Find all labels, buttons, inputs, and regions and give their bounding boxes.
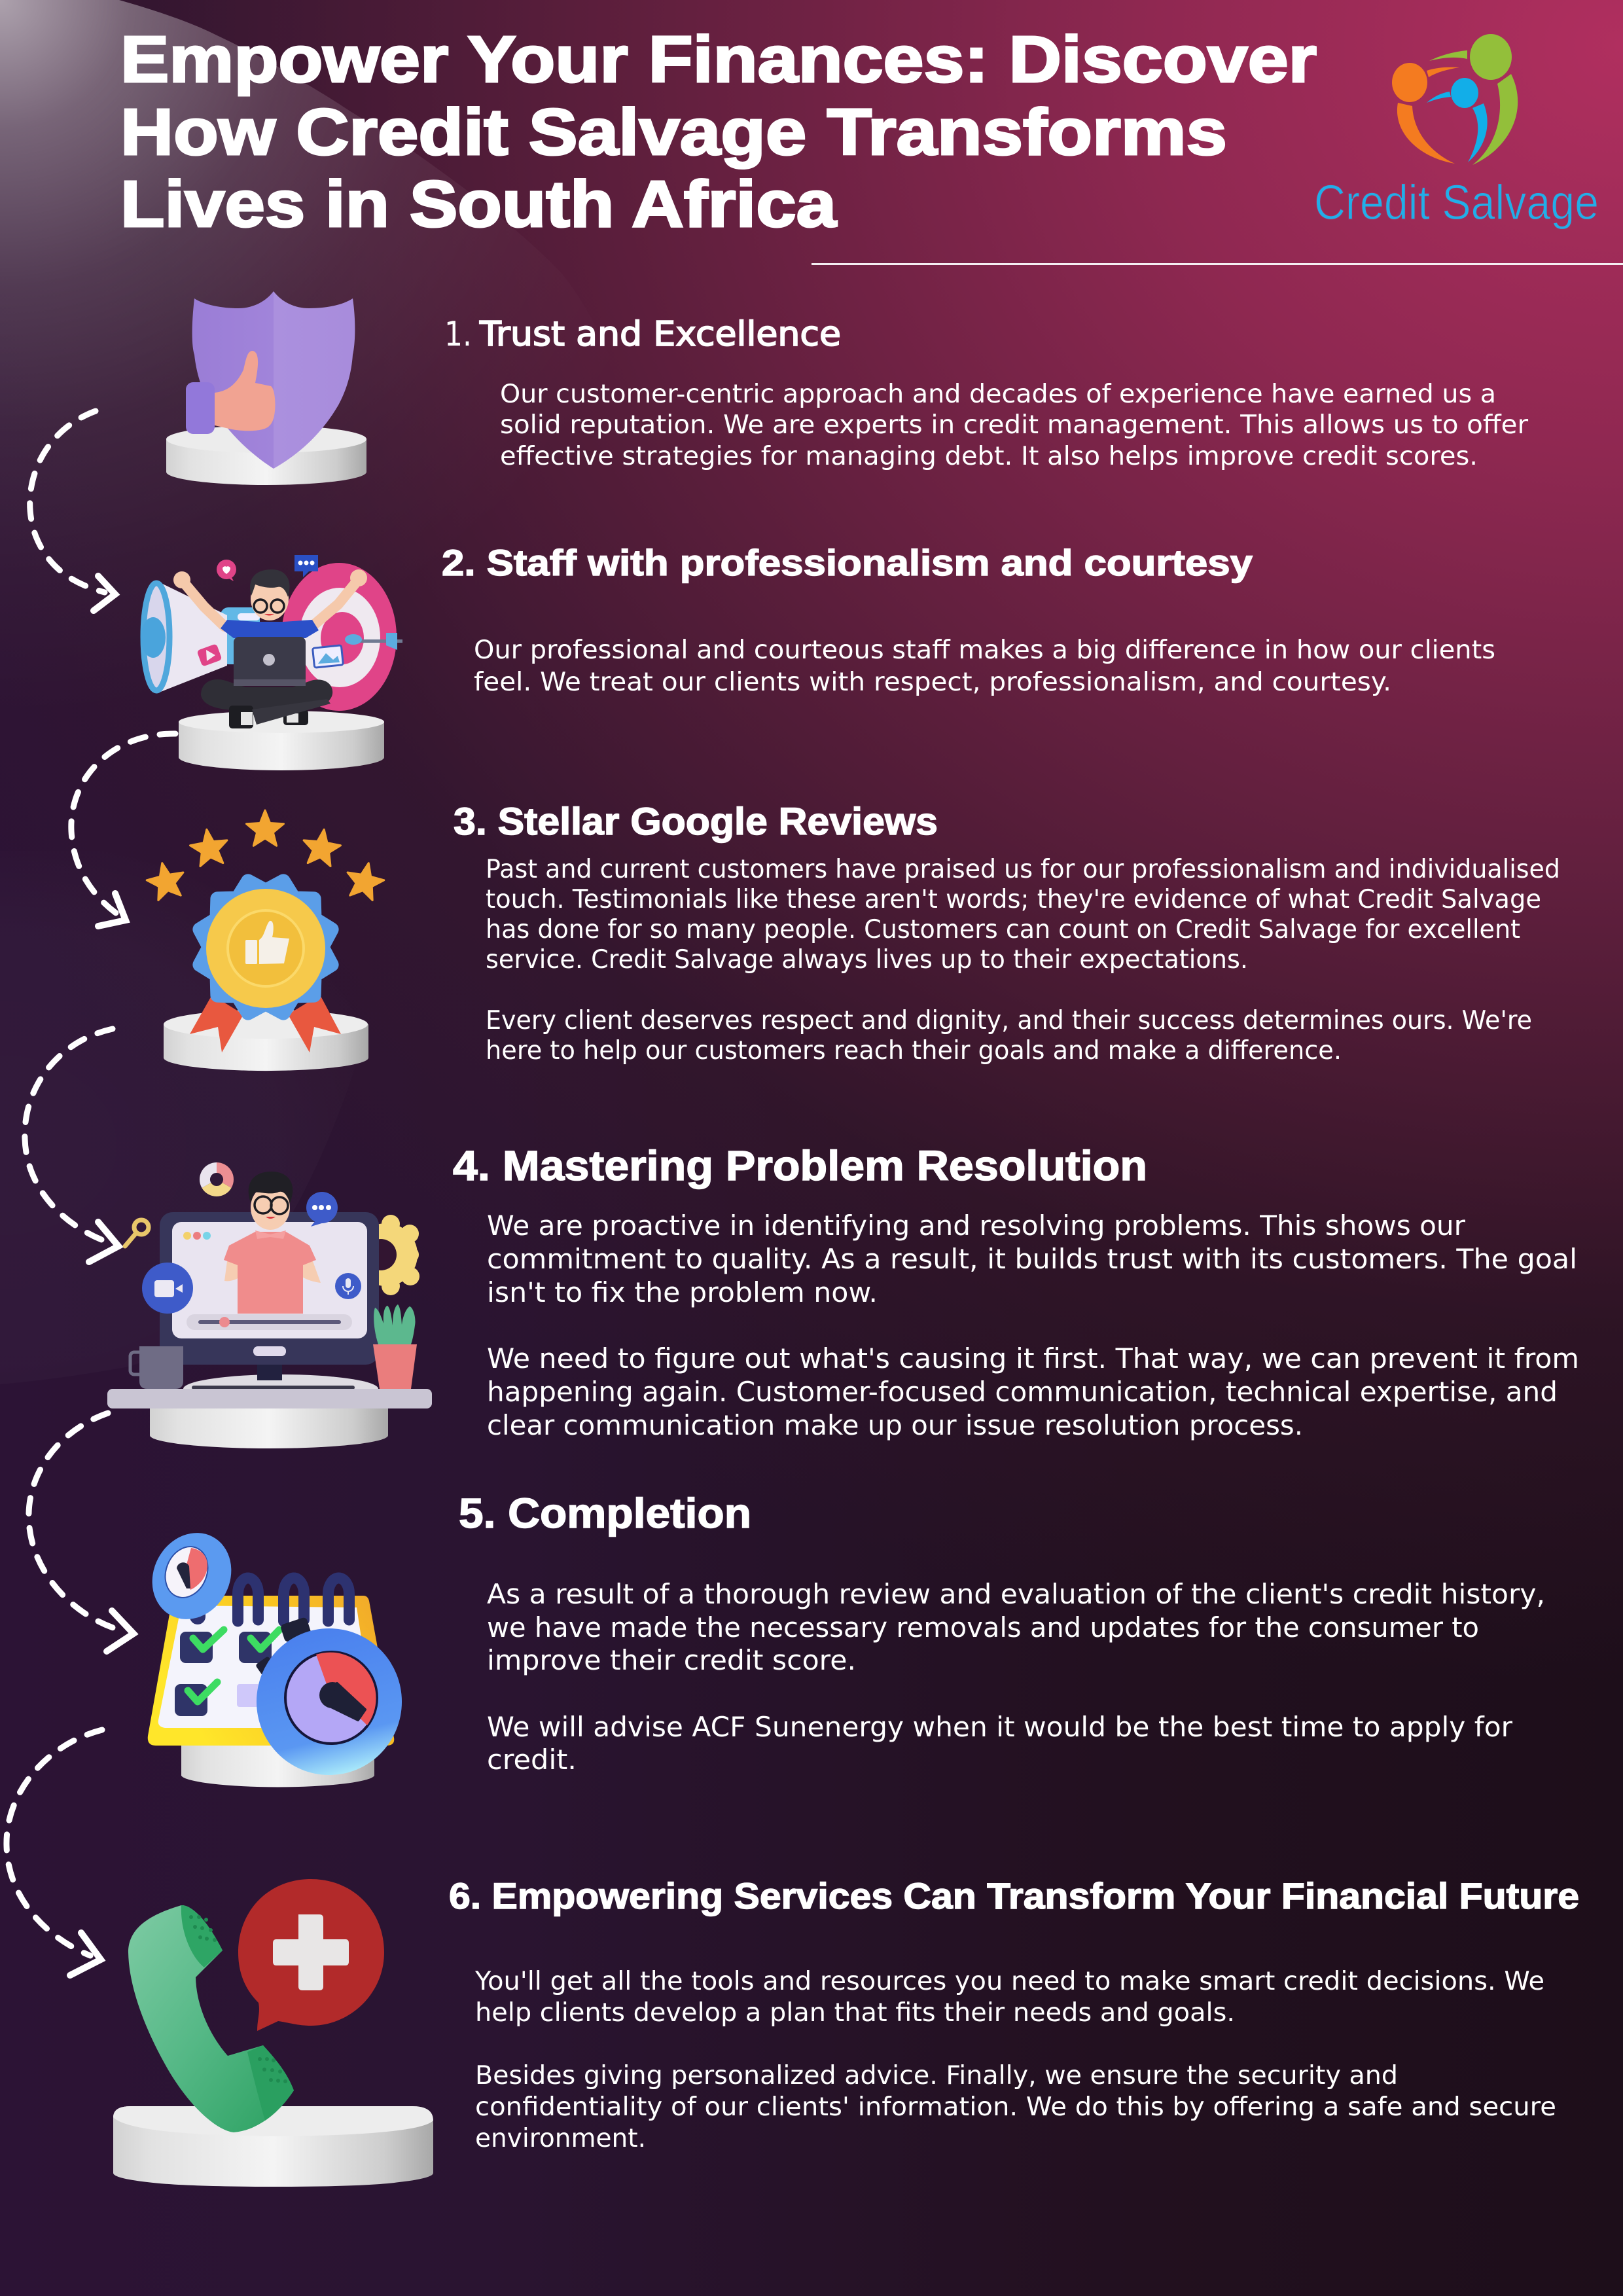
text block 6 [474,1967,1556,2153]
title: How Credit Salvage Transforms [120,96,1227,169]
text block 6: You'll get all the tools and resources you need to make smart credit decisions. We [474,1967,1544,1996]
icon: presenter on desktop monitor on desk [107,1168,432,1448]
text block 4: clear communication make up our issue resolution process. [487,1409,1303,1441]
text block 6: confidentiality of our clients' information. We do this by offering a safe and secure [475,2092,1556,2122]
title [120,23,1317,241]
text block 1: solid reputation. We are experts in credit management. This allows us to offer [500,410,1529,440]
arrow 4 to 5 [29,1413,134,1651]
panel: 6 Empowering Services [113,1875,1579,2187]
logo: Credit Salvage [1314,34,1599,230]
icon: man with laptop, megaphone and target on pedestal [141,555,402,770]
text block 3: Every client deserves respect and dignity, and their success determines ours. We're [486,1006,1532,1035]
heading 4: 4. Mastering Problem Resolution [453,1142,1147,1189]
heading 1: Trust and Excellence [479,315,841,354]
text block 5: As a result of a thorough review and evaluation of the client's credit history, [487,1578,1545,1610]
icon: calendar with checkmarks and gauges on pedestal [137,1519,402,1787]
text block 2: feel. We treat our clients with respect, professionalism, and courtesy. [474,668,1391,697]
title: Empower Your Finances: Discover [120,23,1317,96]
text block 4: isn't to fix the problem now. [487,1276,878,1308]
text block 3: has done for so many people. Customers can count on Credit Salvage for excellent [486,915,1520,944]
text block 1 [500,380,1529,471]
panel: 1 Trust and Excellence [166,291,1529,485]
heading 6: 6. Empowering Services Can Transform Your Financial Future [449,1875,1579,1916]
text block 3: service. Credit Salvage always lives up to their expectations. [486,945,1248,975]
panel: 4 Mastering Problem Resolution [107,1142,1579,1448]
text block 5: improve their credit score. [487,1644,856,1676]
panel: 2 Staff with professionalism and courtesy [141,542,1495,770]
text block 2: Our professional and courteous staff makes a big difference in how our clients [474,636,1495,665]
icon: medal with thumbs up and five stars on pedestal [144,810,387,1071]
text block 4: happening again. Customer-focused communication, technical expertise, and [487,1376,1558,1408]
heading 3: 3. Stellar Google Reviews [454,800,938,843]
text block 3: touch. Testimonials like these aren't words; they're evidence of what Credit Salvage [486,885,1541,914]
panel: 5 Completion [137,1490,1545,1787]
icon: green phone and medical speech bubble on pedestal [113,1879,433,2187]
text block 3: Past and current customers have praised us for our professionalism and individualised [486,855,1560,884]
title: Lives in South Africa [120,168,838,241]
text block 3 [486,855,1560,1066]
arrow 5 to 6 [7,1730,102,1975]
arrow 1 to 2 [30,411,115,611]
text block 1: effective strategies for managing debt. It also helps improve credit scores. [500,442,1478,471]
panel: 3 Stellar Google Reviews [144,800,1560,1071]
text block 3: here to help our customers reach their goals and make a difference. [486,1036,1342,1066]
arrow 2 to 3 [71,734,175,926]
text block 5: we have made the necessary removals and updates for the consumer to [487,1611,1479,1643]
text block 6: help clients develop a plan that fits their needs and goals. [475,1998,1235,2028]
text block 4: We need to figure out what's causing it first. That way, we can prevent it from [487,1342,1579,1374]
text block 4 [487,1210,1579,1441]
text block 4: We are proactive in identifying and resolving problems. This shows our [487,1210,1466,1242]
heading 2: 2. Staff with professionalism and courtesy [442,542,1253,583]
text block 5: credit. [487,1744,577,1776]
text block 2 [474,636,1495,697]
text block 4: commitment to quality. As a result, it builds trust with its customers. The goal [487,1243,1577,1275]
heading 1: 1. [444,315,472,354]
text block 5 [487,1578,1545,1776]
text block 6: environment. [475,2124,646,2153]
text block 5: We will advise ACF Sunenergy when it would be the best time to apply for [487,1711,1513,1743]
icon: shield with thumbs up on pedestal [166,291,366,485]
heading 5: 5. Completion [459,1490,751,1537]
text block 6: Besides giving personalized advice. Finally, we ensure the security and [475,2061,1398,2090]
text block 1: Our customer-centric approach and decades of experience have earned us a [500,380,1496,409]
arrow 3 to 4 [25,1029,118,1262]
